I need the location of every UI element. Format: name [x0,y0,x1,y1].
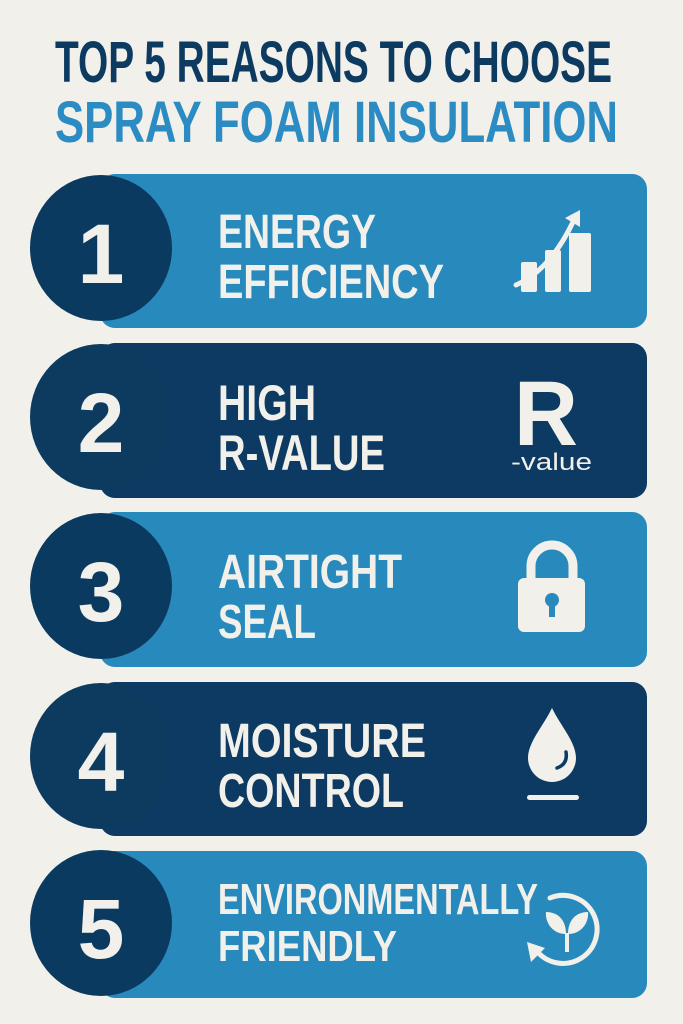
label: SEAL [218,596,316,649]
number circle 5 [30,850,172,996]
icon: recycle leaf [527,895,597,963]
number circle 1 [30,175,172,321]
panel: 3 airtight seal [30,512,647,667]
label [218,375,385,481]
icon: water drop [527,708,579,800]
icon: padlock [518,545,585,632]
label: HIGH [218,375,316,431]
panel: 2 high r-value [30,343,647,498]
number circle 1: 1 [78,207,124,301]
label: CONTROL [218,765,404,818]
label [218,715,426,818]
number circle 3: 3 [78,545,124,639]
number circle 3 [30,513,172,659]
label: MOISTURE [218,715,426,768]
label: ENVIRONMENTALLY [218,875,538,924]
label: ENERGY [218,206,376,259]
label: EFFICIENCY [218,256,444,309]
title [55,30,618,155]
label: AIRTIGHT [218,546,402,599]
label: FRIENDLY [218,922,397,971]
icon: R-value: -value [511,449,592,476]
number circle 2: 2 [78,376,124,470]
icon: bar chart [516,210,591,292]
label [218,546,402,649]
number circle 5: 5 [78,882,124,976]
label: R-VALUE [218,425,385,481]
icon: R-value: R [514,363,578,465]
label [218,206,444,309]
number circle 4 [30,683,172,829]
number circle 4: 4 [78,715,125,809]
number circle 2 [30,344,172,490]
label [218,875,538,971]
panel: 5 environmentally friendly [30,850,647,998]
panel: 1 energy efficiency [30,174,647,328]
panel: 4 moisture control [30,682,647,836]
